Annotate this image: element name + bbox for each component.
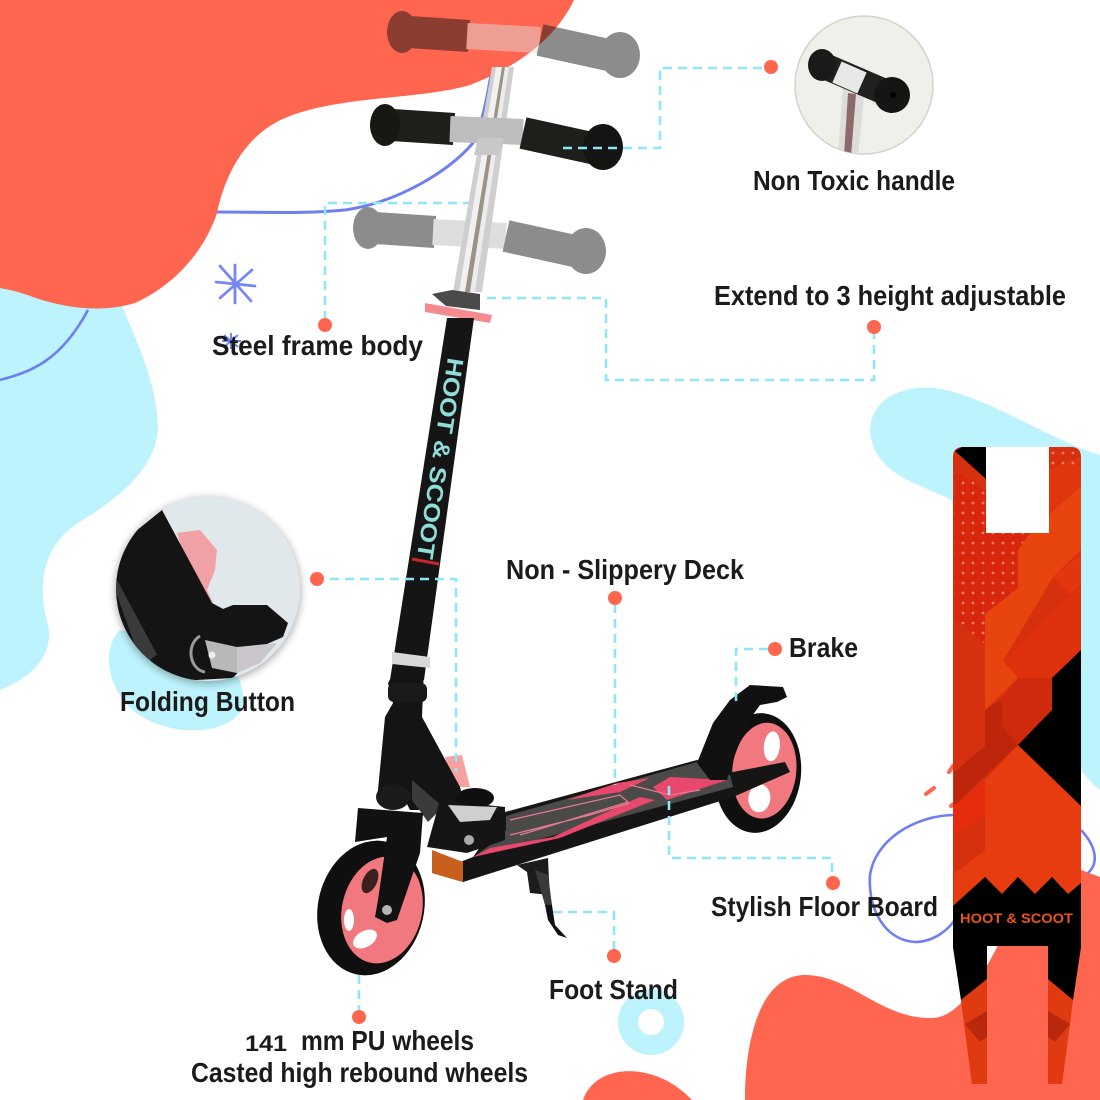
deck graphic dots bbox=[954, 470, 1030, 644]
dot: deck bbox=[608, 591, 622, 605]
label: wheels: 141 bbox=[245, 1031, 287, 1056]
deck: pink graphic pattern bbox=[473, 777, 727, 857]
folding silver hinge bbox=[448, 805, 497, 822]
deck graphic black chevron bbox=[1018, 650, 1081, 806]
background: red bottom right blob bbox=[745, 862, 1100, 1100]
deck graphic accent facet bbox=[1053, 554, 1081, 595]
handlebar: middle bbox=[370, 104, 623, 170]
deck: black body bbox=[432, 760, 790, 882]
icon: purple asterisk bbox=[216, 265, 255, 303]
callout line: steel frame body bbox=[325, 203, 472, 320]
fork gusset bbox=[412, 780, 443, 822]
label: brake: Brake bbox=[789, 632, 858, 663]
label: non toxic handle: Non Toxic handle bbox=[753, 165, 955, 196]
label: wheels: mm PU wheels bbox=[301, 1025, 474, 1056]
silver clamp bbox=[392, 652, 430, 668]
deck graphic darker facet bbox=[1002, 678, 1052, 745]
folding block bbox=[427, 800, 505, 853]
detail circle: non toxic handle bbox=[795, 16, 933, 156]
callout: wheel line bbox=[358, 975, 360, 1010]
deck graphic base bbox=[953, 447, 1081, 1084]
background: purple loop edge bbox=[1081, 830, 1095, 873]
deck graphic top white cutout bbox=[986, 447, 1049, 533]
dot: steel frame bbox=[318, 318, 332, 332]
head tube and neck bbox=[377, 668, 465, 810]
collar bbox=[388, 683, 427, 702]
scooter: main figure bbox=[304, 11, 807, 986]
handlebar: lower ghost position bbox=[353, 207, 606, 274]
icon: red dashes bbox=[926, 766, 955, 806]
dot: extend bbox=[867, 320, 881, 334]
kickstand bbox=[517, 858, 567, 938]
callout: foot stand line bbox=[553, 912, 614, 950]
pink ring bbox=[425, 303, 492, 323]
callout: extend line bbox=[487, 298, 874, 380]
deck graphic black base bbox=[953, 877, 1081, 1000]
deck graphic top right tone bbox=[1049, 456, 1081, 515]
label: steel frame: Steel frame body bbox=[212, 330, 424, 361]
rear wheel bbox=[709, 709, 807, 837]
deck graphic dotted zone bbox=[954, 470, 1030, 644]
deck graphic panel bbox=[953, 447, 1081, 1084]
callout: brake line bbox=[736, 649, 768, 703]
deck graphic right leg bbox=[1048, 979, 1073, 1084]
folding button cap bbox=[456, 788, 494, 808]
red stripe on tube bbox=[412, 559, 439, 564]
label: floor board: Stylish Floor Board bbox=[711, 891, 938, 922]
background: blue blob behind folding button bbox=[109, 630, 243, 730]
label: folding button: Folding Button bbox=[120, 686, 295, 717]
callout: non slippery deck line bbox=[614, 604, 616, 785]
brake fender bbox=[697, 685, 787, 780]
deck: pink outlines bbox=[510, 785, 700, 835]
pink rear latch bbox=[445, 755, 470, 787]
detail circle: folding button bbox=[100, 497, 301, 684]
neck bearing bbox=[376, 784, 410, 810]
deck graphic left leg bbox=[961, 979, 987, 1084]
dot: wheel bbox=[352, 1010, 366, 1024]
deck graphic right leg shade bbox=[1048, 1011, 1070, 1042]
stem: silver tube bbox=[453, 67, 514, 292]
label: extend: Extend to 3 height adjustable bbox=[714, 280, 1066, 311]
label: deck: Non - Slippery Deck bbox=[506, 554, 745, 585]
deck: top surface bbox=[473, 762, 733, 857]
dashed line: folding (under head) bbox=[330, 579, 456, 772]
callout: floor board line bbox=[669, 786, 832, 876]
dot: brake bbox=[768, 642, 782, 656]
reflector bbox=[432, 850, 463, 882]
label: wheels bbox=[191, 1025, 528, 1088]
background: red small bottom blob bbox=[583, 1071, 692, 1100]
dot: non toxic handle bbox=[764, 60, 778, 74]
deck graphic red facet bbox=[1003, 586, 1081, 678]
callout: non toxic handle line bbox=[563, 68, 765, 148]
deck graphic brand text: HOOT & SCOOT bbox=[960, 910, 1073, 926]
background: red top blob bbox=[0, 0, 574, 309]
background: light blue right blob bbox=[870, 388, 1100, 790]
deck graphic black corner bbox=[955, 447, 986, 479]
label: wheels: Casted high rebound wheels bbox=[191, 1057, 528, 1088]
dot: floor board bbox=[826, 876, 840, 890]
deck graphic orange facet bbox=[985, 486, 1081, 710]
background: purple loop right bbox=[870, 815, 956, 942]
deck graphic top right dots bbox=[1049, 447, 1081, 470]
dot: folding button bbox=[310, 572, 324, 586]
stem: black lower tube bbox=[390, 318, 474, 680]
handlebar: top ghost position bbox=[387, 11, 640, 78]
deck graphic dark band bbox=[954, 699, 1018, 806]
brand text on tube: HOOT & SCOOT bbox=[412, 356, 469, 561]
background: light blue left blob bbox=[0, 280, 158, 690]
deck graphic lower orange bbox=[954, 745, 1081, 906]
axle bolt bbox=[382, 905, 392, 915]
deck graphic low facet bbox=[954, 815, 985, 874]
deck graphic bright red facet bbox=[954, 780, 985, 836]
stem clamp bbox=[432, 290, 480, 310]
background: purple curve left bbox=[0, 310, 88, 380]
label: foot stand: Foot Stand bbox=[549, 974, 678, 1005]
icon: blue ring bbox=[628, 999, 674, 1045]
front wheel bbox=[304, 830, 438, 986]
icon: small purple asterisk bbox=[222, 333, 241, 349]
deck graphic left leg shade bbox=[965, 1011, 987, 1042]
dot: foot stand bbox=[607, 949, 621, 963]
background: purple curve top bbox=[215, 75, 491, 212]
front fork bbox=[355, 808, 423, 923]
bolt bbox=[464, 835, 474, 845]
